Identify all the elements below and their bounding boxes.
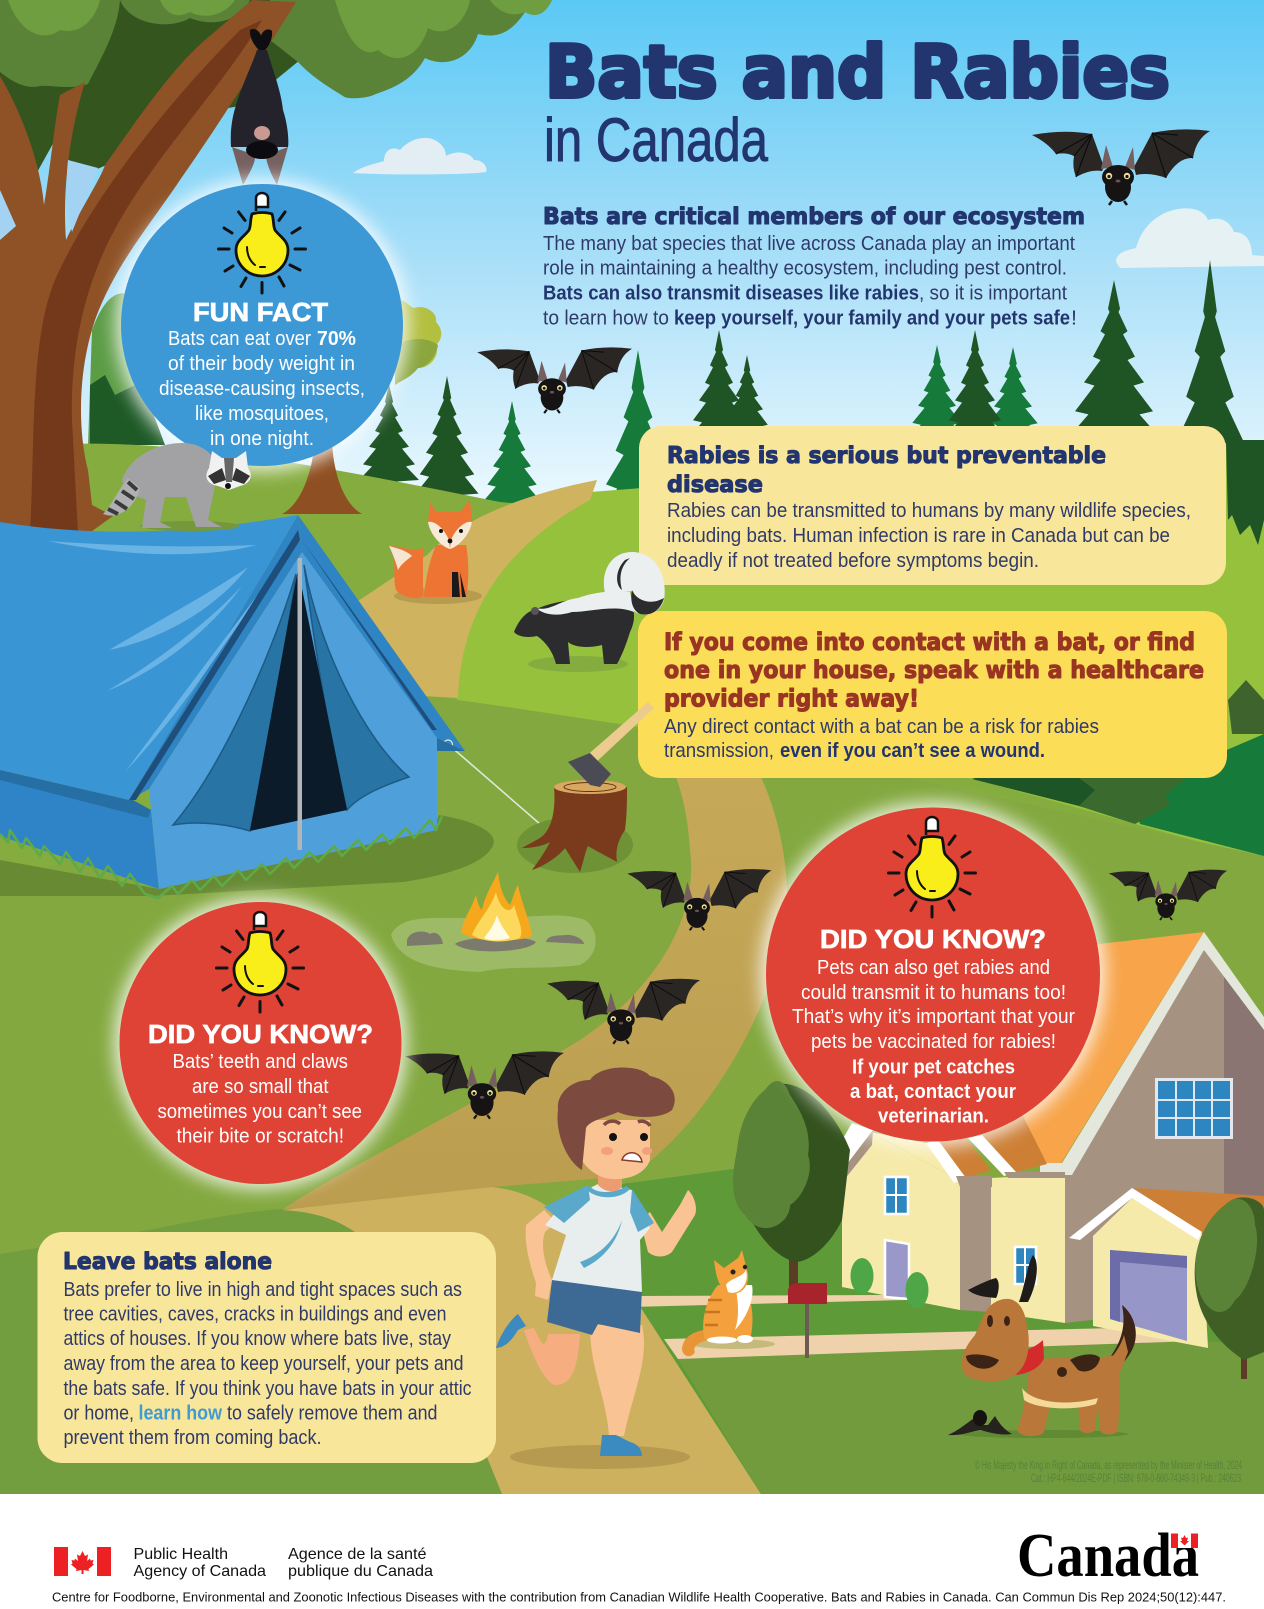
title: in Canada <box>544 106 768 174</box>
upper window <box>1155 1078 1233 1139</box>
panel text: including bats. Human infection is rare in Canada but can be <box>667 525 1170 547</box>
path foreground <box>282 1187 761 1494</box>
tree centre <box>733 1081 850 1295</box>
bats flying <box>405 129 1227 1119</box>
hill back left <box>0 444 600 720</box>
tent ridge flap <box>129 515 465 800</box>
foliage light <box>8 0 552 58</box>
tent rope <box>449 745 548 831</box>
icon: canadian flag <box>54 1547 111 1576</box>
panel: leave bats alone <box>38 1232 496 1463</box>
warning heading: one in your house, speak with a healthcare <box>664 656 1204 684</box>
panel: contact with a bat <box>638 611 1227 778</box>
warning text: transmission, <box>664 740 774 762</box>
cat <box>682 1250 775 1356</box>
panel heading: Rabies is a serious but preventable <box>667 443 1106 469</box>
icon: light bulb <box>216 912 304 1012</box>
footer <box>0 1494 1264 1609</box>
text: Bats’ teeth and claws <box>172 1051 348 1073</box>
warning text: even if you can’t see a wound. <box>780 740 1045 762</box>
bushes <box>850 1258 874 1294</box>
icon: light bulb <box>888 817 976 917</box>
fun fact heading: FUN FACT <box>193 297 328 327</box>
tent door flaps <box>173 565 409 831</box>
trunk <box>0 0 296 534</box>
campfire <box>391 872 596 972</box>
white roof trims <box>821 1123 1016 1183</box>
title: Bats and Rabies <box>545 30 1170 114</box>
cloud left <box>353 138 486 174</box>
agency name english <box>134 1546 266 1580</box>
text: could transmit it to humans too! <box>801 982 1066 1004</box>
icon: bat 3 <box>627 869 772 930</box>
title <box>544 30 1170 174</box>
fun fact text: of their body weight in <box>168 353 355 375</box>
intro body: to learn how to <box>543 308 669 330</box>
text: their bite or scratch! <box>176 1126 344 1148</box>
agency name french: publique du Canada <box>288 1563 433 1580</box>
text: learn how <box>138 1402 222 1424</box>
text: away from the area to keep yourself, your pets and <box>64 1353 464 1375</box>
front door <box>885 1240 909 1299</box>
roof lower edge <box>0 770 151 818</box>
copyright <box>975 1458 1242 1485</box>
panel: rabies is a serious but preventable disease <box>639 426 1226 585</box>
fun fact text: like mosquitoes, <box>195 403 329 425</box>
foliage dark <box>0 0 300 185</box>
text: or home, <box>64 1402 134 1424</box>
boy sleeves <box>544 1185 654 1232</box>
intro body: role in maintaining a healthy ecosystem, including pest control. <box>543 258 1067 280</box>
icon: bat 4 <box>1109 870 1227 920</box>
text: attics of houses. If you know where bats live, stay <box>64 1328 451 1350</box>
roof highlights <box>48 541 282 772</box>
boy back leg and shoe <box>524 1328 580 1385</box>
back tree <box>282 440 362 514</box>
icon: bat 2 <box>477 347 632 413</box>
boy front leg <box>590 1325 644 1436</box>
text: Pets can also get rabies and <box>817 957 1050 979</box>
boy shorts <box>547 1280 642 1335</box>
text: If your pet catches <box>852 1056 1015 1078</box>
tree stump and axe <box>517 702 654 873</box>
fun fact text: disease-causing insects, <box>159 378 365 400</box>
tent front wall <box>149 552 437 889</box>
forest band right <box>972 440 1264 856</box>
circle: did you know pets <box>761 802 1105 1146</box>
fox <box>389 500 482 604</box>
intro heading: Bats are critical members of our ecosystem <box>543 204 1085 230</box>
small windows <box>885 1177 1036 1284</box>
path middle <box>282 777 787 1210</box>
boy arm left <box>526 1210 556 1300</box>
garage <box>1069 1188 1264 1348</box>
walkways <box>632 1295 1196 1359</box>
text: Bats prefer to live in high and tight spaces such as <box>64 1279 462 1301</box>
fun fact text: in one night. <box>210 428 314 450</box>
agency name french: Agence de la santé <box>288 1546 427 1563</box>
icon: hanging bat <box>231 29 288 185</box>
tree right <box>1195 1197 1264 1379</box>
warning heading <box>664 628 1204 712</box>
boy hair <box>557 1067 675 1170</box>
text <box>64 1279 472 1449</box>
orange gables <box>938 1110 1047 1178</box>
tent pole <box>298 558 302 850</box>
tree <box>0 0 552 534</box>
text <box>158 1051 362 1148</box>
intro body: Bats can also transmit diseases like rabies <box>543 282 919 304</box>
canada wordmark: Canada <box>1017 1522 1199 1590</box>
text: veterinarian. <box>878 1106 989 1128</box>
tent roof <box>0 515 298 800</box>
house orange roof <box>1000 932 1204 1165</box>
path upper <box>355 480 597 698</box>
warning heading: If you come into contact with a bat, or find <box>664 628 1195 656</box>
text <box>792 957 1075 1128</box>
heading: DID YOU KNOW? <box>148 1019 373 1049</box>
text: prevent them from coming back. <box>64 1427 322 1449</box>
circle: fun fact <box>116 179 408 471</box>
agency name english: Agency of Canada <box>134 1563 266 1580</box>
cloud right <box>1116 208 1264 268</box>
intro body: The many bat species that live across Canada play an important <box>543 233 1075 255</box>
boy <box>496 1067 696 1469</box>
text: That’s why it’s important that your <box>792 1006 1075 1028</box>
boy neck and face <box>598 1170 622 1191</box>
agency name french <box>288 1546 433 1580</box>
boy arm right <box>640 1190 696 1256</box>
intro body: keep yourself, your family and your pets safe <box>674 308 1070 330</box>
left lower hill <box>0 1209 502 1494</box>
text: sometimes you can’t see <box>158 1101 362 1123</box>
warning heading: provider right away! <box>664 684 919 712</box>
icon: bat on ground <box>948 1410 1012 1435</box>
tent shadow <box>0 815 494 896</box>
text: pets be vaccinated for rabies! <box>811 1031 1056 1053</box>
agency name english: Public Health <box>134 1546 228 1563</box>
text: tree cavities, caves, cracks in buildings and even <box>64 1304 446 1326</box>
icon: bat 5 <box>547 979 700 1044</box>
yellow house blocks <box>842 1132 1065 1323</box>
panel text: Rabies can be transmitted to humans by many wildlife species, <box>667 500 1191 522</box>
roof trim <box>1040 932 1264 1175</box>
fun fact text: 70% <box>317 328 356 350</box>
tent doorway <box>250 569 347 831</box>
icon: light bulb <box>218 193 306 293</box>
intro text <box>543 204 1085 330</box>
panel text: deadly if not treated before symptoms begin. <box>667 550 1039 572</box>
text: are so small that <box>192 1076 329 1098</box>
citation: Centre for Foodborne, Environmental and Zoonotic Infectious Diseases with the contribution from Canadian Wildlife Health Cooperative. Bats and Rabies in Canada. Can Commun Dis Rep 2024;50(12):447. <box>52 1590 1226 1604</box>
foliage mid <box>0 0 552 98</box>
skunk <box>514 552 665 672</box>
panel text <box>667 500 1191 572</box>
text: a bat, contact your <box>850 1081 1016 1103</box>
text: to safely remove them and <box>227 1402 438 1424</box>
house gable wall <box>1065 950 1264 1323</box>
hill bright right <box>457 440 1264 860</box>
house <box>821 932 1264 1348</box>
circle: did you know teeth <box>114 897 406 1189</box>
mailbox <box>788 1283 827 1358</box>
boy shirt <box>545 1183 650 1292</box>
intro body <box>543 233 1077 330</box>
boy shadow <box>510 1445 690 1469</box>
tent grass <box>0 816 442 898</box>
icon: bat 6 <box>405 1051 564 1119</box>
tent side wall <box>0 772 159 889</box>
fun fact text <box>159 328 365 450</box>
panel heading <box>667 443 1106 498</box>
dog <box>958 1255 1136 1438</box>
lawn <box>600 1168 1264 1494</box>
heading: DID YOU KNOW? <box>820 924 1046 954</box>
raccoon <box>103 443 251 531</box>
boy front shoe <box>600 1435 642 1456</box>
boy eyes and mouth <box>609 1133 617 1141</box>
intro body: ! <box>1071 308 1077 330</box>
heading: Leave bats alone <box>63 1249 272 1275</box>
pine forest <box>88 260 1261 560</box>
fun fact text: Bats can eat over <box>168 328 311 350</box>
intro body: , so it is important <box>919 282 1067 304</box>
warning text <box>664 716 1099 762</box>
panel heading: disease <box>667 472 763 498</box>
hill lower <box>0 696 1264 1494</box>
text: the bats safe. If you think you have bats in your attic <box>64 1378 472 1400</box>
tent <box>0 515 548 898</box>
warning text: Any direct contact with a bat can be a risk for rabies <box>664 716 1099 738</box>
icon: bat 1 <box>1032 129 1210 205</box>
